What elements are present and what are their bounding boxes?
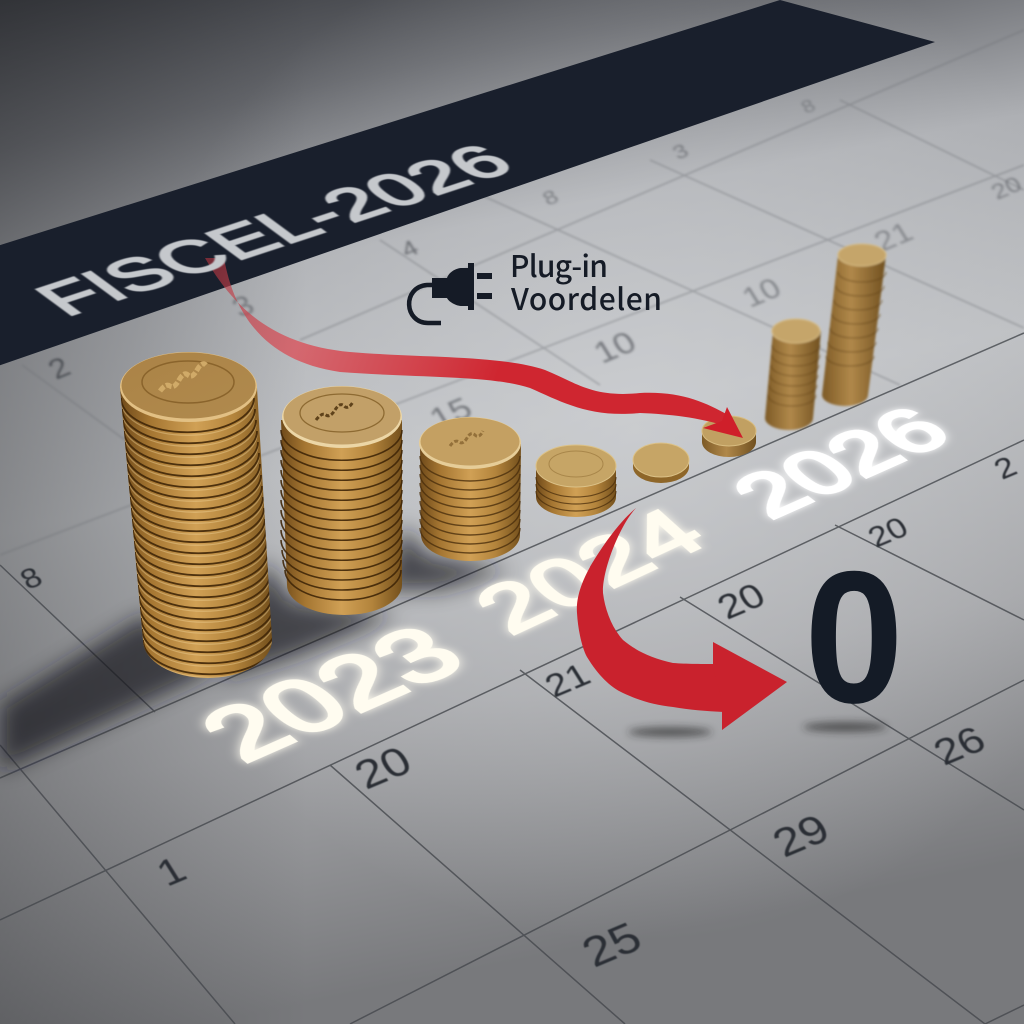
coin stack 5 bbox=[633, 443, 689, 483]
calendar day numbers: 1 bbox=[149, 849, 194, 894]
calendar day numbers: 10 bbox=[737, 273, 787, 314]
calendar day numbers: 15 bbox=[424, 392, 479, 436]
coin stack 1 bbox=[120, 352, 276, 678]
icon: plug bbox=[409, 263, 492, 323]
coin stack 6 bbox=[702, 416, 756, 457]
coin stack 8 bbox=[822, 244, 886, 406]
calendar day numbers: 8 bbox=[538, 185, 563, 210]
calendar day numbers: 2 bbox=[988, 450, 1023, 486]
year 2023: 2023 bbox=[178, 610, 485, 777]
coin stack 3 bbox=[419, 417, 521, 561]
calendar day numbers: 26 bbox=[926, 718, 993, 773]
calendar day numbers: 29 bbox=[765, 807, 838, 866]
calendar day numbers: 2 bbox=[43, 352, 76, 386]
calendar day numbers: 8 bbox=[15, 562, 48, 596]
calendar day numbers: 25 bbox=[573, 913, 650, 976]
coin stack 2 bbox=[281, 386, 402, 615]
calendar day numbers: 21 bbox=[538, 656, 597, 704]
calendar day numbers: 4 bbox=[397, 236, 423, 263]
calendar day numbers: 8 bbox=[798, 96, 820, 118]
year 2026: 2026 bbox=[714, 394, 968, 530]
year 2024: 2024 bbox=[456, 494, 723, 648]
floating shadows bbox=[628, 722, 887, 737]
plug-in label: Voordelen bbox=[510, 275, 662, 319]
red trend arrow bbox=[205, 258, 743, 438]
calendar day numbers: 3 bbox=[227, 290, 260, 324]
calendar day numbers: 21 bbox=[869, 217, 919, 258]
coin stack 7 bbox=[765, 319, 821, 430]
band title: FISCEL-2026 bbox=[20, 135, 529, 325]
big red arrow bbox=[577, 508, 787, 730]
calendar day numbers: 3 bbox=[668, 139, 693, 164]
calendar day numbers: 20 bbox=[347, 739, 420, 798]
coin shadows bbox=[0, 525, 510, 770]
calendar day numbers: 10 bbox=[588, 326, 643, 370]
calendar day numbers: 20 bbox=[862, 511, 914, 554]
coin stack 4 bbox=[536, 445, 616, 517]
header band bbox=[0, 0, 935, 386]
plug-in label: Plug-in bbox=[510, 242, 608, 286]
plug-in label bbox=[510, 242, 662, 319]
big zero: 0 bbox=[804, 532, 904, 742]
calendar day numbers: 20 bbox=[710, 576, 772, 626]
